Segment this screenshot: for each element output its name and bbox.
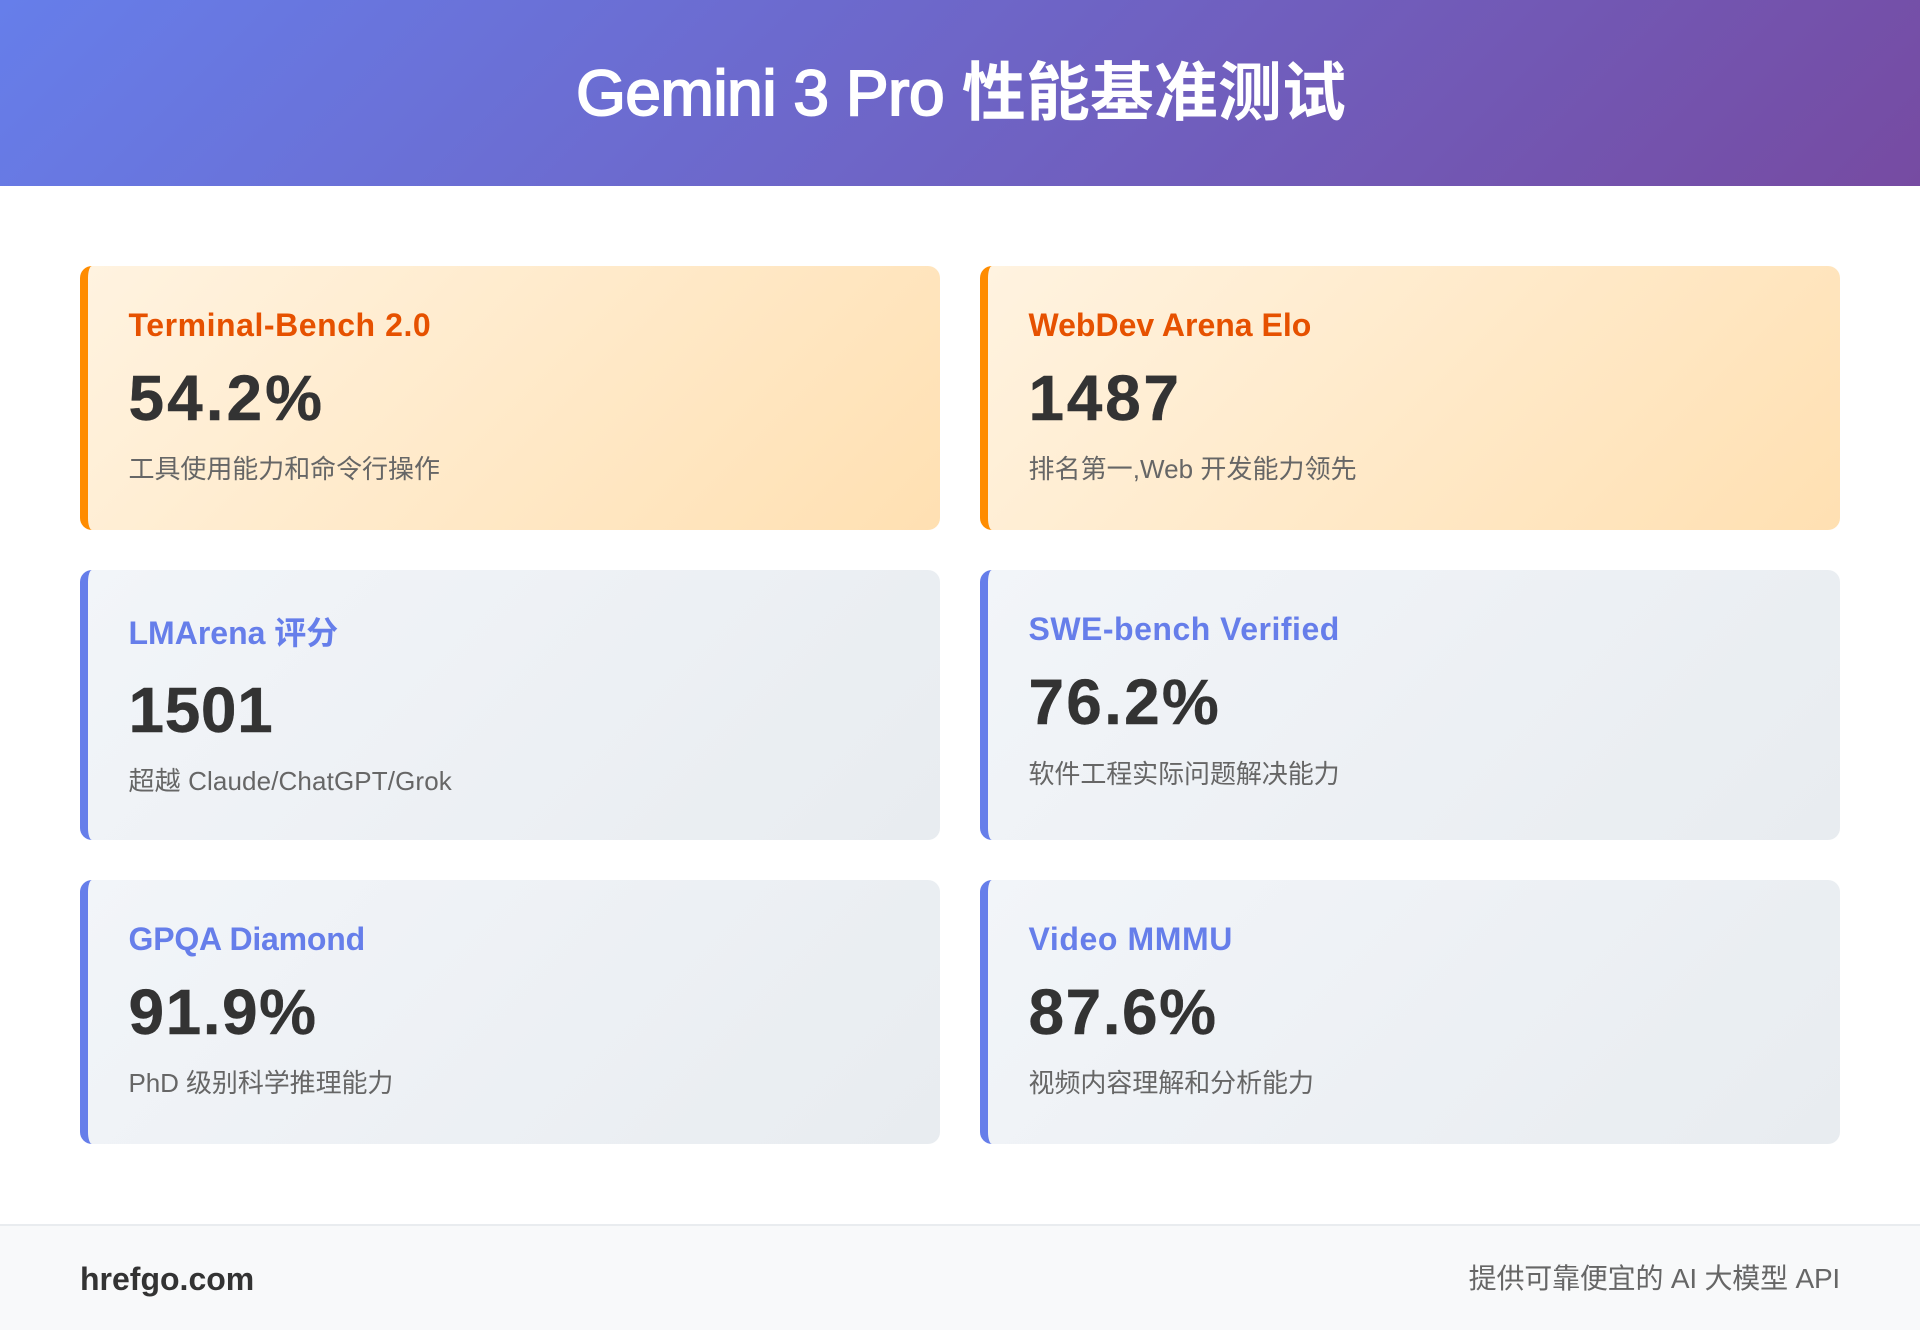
metric value: 54.2% bbox=[128, 362, 325, 434]
card description: PhD 级别科学推理能力 bbox=[128, 1068, 393, 1098]
card description: 软件工程实际问题解决能力 bbox=[1028, 759, 1340, 789]
card description: 排名第一,Web 开发能力领先 bbox=[1028, 454, 1357, 484]
metric value: 91.9% bbox=[128, 976, 317, 1048]
card heading: SWE-bench Verified bbox=[1028, 611, 1340, 647]
metric value: 76.2% bbox=[1028, 666, 1221, 738]
card heading: LMArena 评分 bbox=[128, 615, 338, 651]
footer tagline: 提供可靠便宜的 AI 大模型 API bbox=[1469, 1263, 1840, 1294]
panel: LMArena score bbox=[80, 570, 940, 840]
panel: Video MMMU bbox=[980, 880, 1840, 1144]
metric value: 87.6% bbox=[1028, 976, 1217, 1048]
header banner bbox=[0, 0, 1920, 186]
panel: SWE-bench Verified bbox=[980, 570, 1840, 840]
panel: GPQA Diamond bbox=[80, 880, 940, 1144]
footer brand: hrefgo.com bbox=[80, 1261, 254, 1297]
metric value: 1501 bbox=[128, 674, 273, 746]
card heading: WebDev Arena Elo bbox=[1028, 307, 1311, 343]
card heading: GPQA Diamond bbox=[128, 921, 365, 957]
card heading: Video MMMU bbox=[1028, 921, 1233, 957]
card description: 超越 Claude/ChatGPT/Grok bbox=[128, 766, 452, 796]
title: Gemini 3 Pro 性能基准测试 bbox=[576, 57, 1346, 129]
panel: Terminal-Bench 2.0 bbox=[80, 266, 940, 530]
card description: 工具使用能力和命令行操作 bbox=[128, 454, 440, 484]
footer bbox=[0, 1224, 1920, 1330]
card description: 视频内容理解和分析能力 bbox=[1028, 1068, 1314, 1098]
panel: WebDev Arena Elo bbox=[980, 266, 1840, 530]
card heading: Terminal-Bench 2.0 bbox=[128, 307, 431, 343]
metric value: 1487 bbox=[1028, 362, 1182, 434]
